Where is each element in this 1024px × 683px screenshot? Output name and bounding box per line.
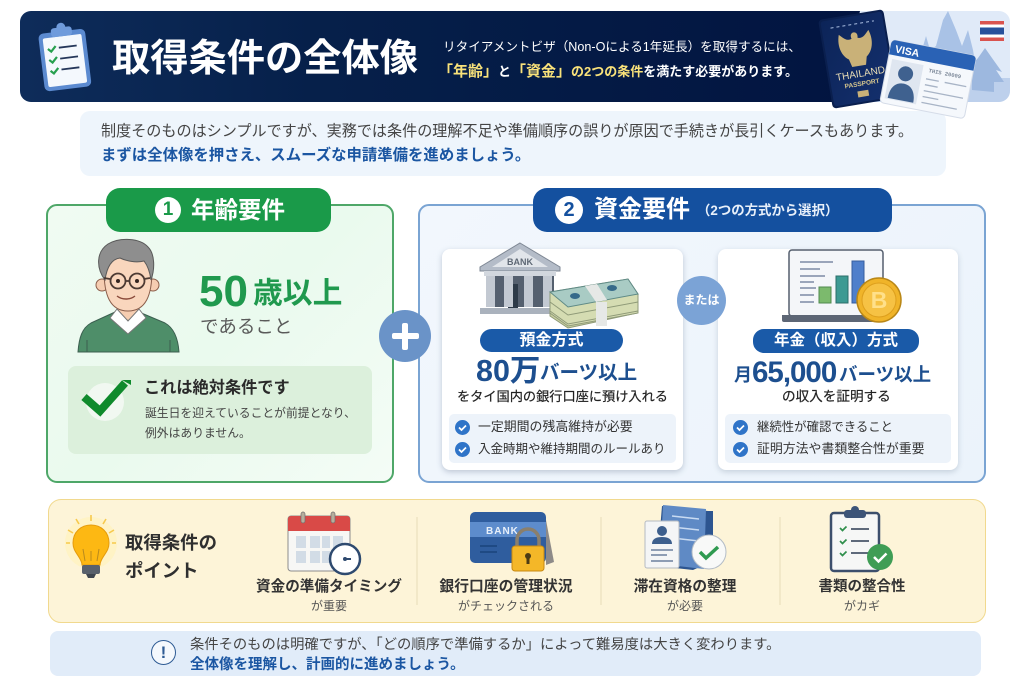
callout body — [145, 406, 356, 440]
plus vertical — [402, 323, 408, 350]
funds tab heading — [533, 188, 892, 232]
icon: visa card — [880, 40, 976, 119]
card: pension method — [718, 249, 958, 470]
point: residence status — [634, 505, 736, 613]
heading line 1: 取得条件の — [125, 532, 217, 553]
point label: 書類の整合性 — [818, 579, 906, 595]
icon: laptop with coin: B — [871, 287, 887, 313]
deposit method pill — [480, 329, 623, 352]
title: 取得条件の全体像 — [112, 37, 418, 80]
amount number: 65,000 — [752, 356, 836, 389]
intro box — [80, 111, 946, 176]
amount unit: バーツ以上 — [839, 364, 931, 385]
icon: visa card: THIS 20009 — [928, 67, 962, 80]
icon: check 1 — [455, 420, 470, 435]
icon: passport: PASSPORT — [844, 78, 880, 91]
note 2: 証明方法や書類整合性が重要 — [757, 441, 925, 456]
funds heading text: 資金要件 — [594, 196, 690, 223]
number badge 2 — [555, 196, 583, 224]
point label: 滞在資格の整理 — [634, 579, 736, 595]
icon: bank card with lock: BANK — [486, 526, 519, 537]
pension description: の収入を証明する — [782, 389, 891, 404]
body line 2: 例外はありません。 — [145, 426, 251, 440]
icon: clipboard with check — [830, 506, 893, 572]
number badge 1 — [155, 197, 181, 223]
amount number: 80万 — [476, 354, 540, 388]
description line 1: リタイアメントビザ（Non-Oによる1年延長）を取得するには、 — [443, 40, 801, 54]
header banner — [20, 11, 1010, 102]
pension method pill: 年金（収入）方式 — [774, 332, 898, 349]
icon: clipboard — [38, 22, 92, 92]
note 2: 入金時期や維持期間のルールあり — [478, 442, 666, 456]
icon: laptop with coin — [782, 249, 902, 323]
note 1: 継続性が確認できること — [757, 420, 893, 434]
icon: exclamation — [151, 640, 176, 665]
icon: plus — [379, 310, 431, 362]
or badge — [677, 276, 726, 325]
icon: check 1 — [733, 420, 748, 435]
body line 1: 誕生日を迎えていることが前提となり、 — [145, 406, 356, 420]
plus horizontal — [392, 333, 419, 339]
point note: がチェックされる — [458, 599, 554, 613]
icon: bank — [480, 242, 560, 314]
bottom note — [50, 631, 981, 676]
icon: passport — [818, 10, 890, 108]
amount unit: バーツ以上 — [540, 362, 637, 384]
note line 1: 条件そのものは明確ですが、「どの順序で準備するか」によって難易度は大きく変わります。 — [190, 637, 780, 653]
point note: が重要 — [311, 599, 347, 613]
deposit notes — [449, 414, 676, 463]
point: document consistency — [818, 506, 906, 613]
icon: visa card: VISA — [894, 43, 921, 60]
point label: 銀行口座の管理状況 — [439, 579, 573, 595]
icon: light bulb — [65, 515, 117, 578]
icon: bank card with lock — [470, 512, 554, 572]
header description — [438, 40, 801, 80]
age number: 50 — [199, 267, 248, 316]
note 1: 一定期間の残高維持が必要 — [478, 419, 633, 434]
number badge 2: 2 — [563, 199, 575, 221]
panel: funds requirement — [418, 204, 986, 483]
or badge: または — [683, 293, 720, 307]
age unit: 歳以上 — [253, 277, 342, 310]
pension notes — [725, 414, 951, 463]
banner background — [20, 11, 1010, 102]
point: bank account — [439, 512, 573, 613]
note line 2: 全体像を理解し、計画的に進めましょう。 — [190, 657, 465, 673]
age tab heading — [106, 188, 331, 232]
deposit amount — [476, 354, 637, 388]
intro emphasis: まずは全体像を押さえ、スムーズな申請準備を進めましょう。 — [101, 147, 530, 164]
amount prefix: 月 — [734, 365, 752, 385]
pension amount — [734, 356, 931, 389]
funds heading note: （2つの方式から選択） — [697, 203, 838, 218]
number badge 1: 1 — [163, 199, 173, 220]
heading line 2: ポイント — [125, 560, 199, 581]
icon: thai flag — [980, 21, 1004, 41]
icon: check 2 — [455, 442, 470, 457]
icon: senior man — [78, 238, 180, 352]
icon: passport: THAILAND — [835, 65, 886, 84]
key points heading — [125, 532, 217, 581]
point note: がカギ — [844, 599, 880, 613]
panel: key points — [48, 499, 986, 623]
deposit description: をタイ国内の銀行口座に預け入れる — [457, 389, 668, 404]
age requirement value — [199, 267, 342, 316]
icon: green check — [82, 380, 131, 421]
point note: が必要 — [667, 599, 703, 613]
intro text: 制度そのものはシンプルですが、実務では条件の理解不足や準備順序の誤りが原因で手続きが長引くケースもあります。 — [101, 123, 913, 140]
age heading text: 年齢要件 — [191, 197, 285, 223]
icon: exclamation: ! — [161, 643, 166, 662]
icon: calendar — [288, 512, 362, 576]
point label: 資金の準備タイミング — [256, 579, 402, 595]
card: deposit method — [442, 249, 683, 470]
icon: cash stacks — [549, 278, 639, 328]
icon: bank: BANK — [507, 257, 533, 267]
age condition text: であること — [200, 316, 292, 337]
callout heading: これは絶対条件です — [144, 379, 290, 397]
divider lines — [416, 517, 780, 605]
pension method pill — [753, 329, 919, 353]
icon: check 2 — [733, 442, 748, 457]
deposit method pill: 預金方式 — [519, 332, 584, 349]
point: funds timing — [256, 512, 402, 613]
callout: absolute condition — [68, 366, 372, 454]
panel: age requirement — [46, 204, 394, 483]
description line 2: 「年齢」と「資金」の2つの条件を満たす必要があります。 — [438, 63, 798, 80]
icon: documents — [644, 505, 726, 570]
